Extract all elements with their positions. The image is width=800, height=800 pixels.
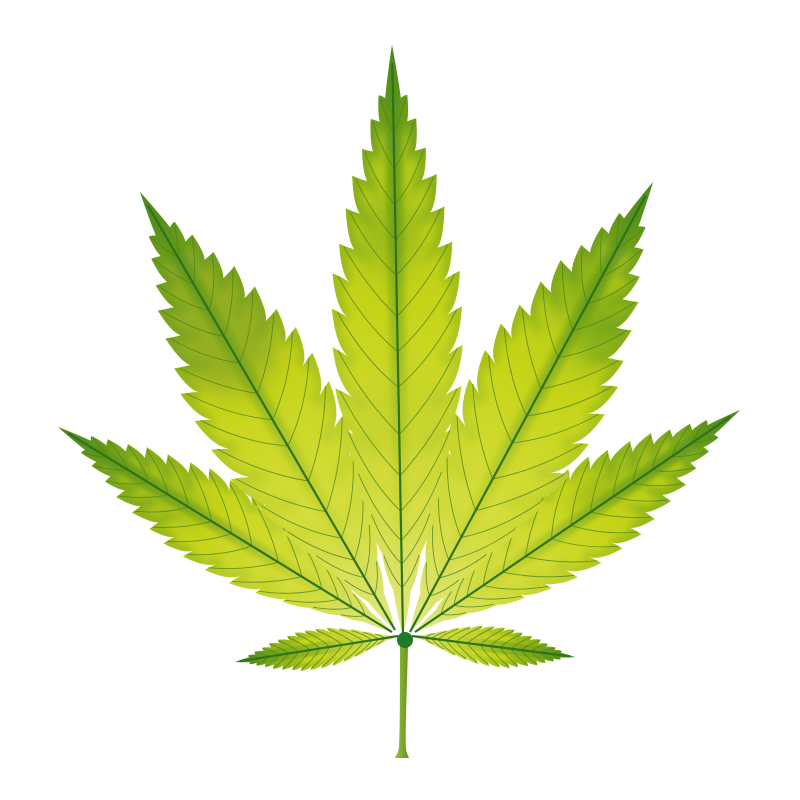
leaflet: lower left [58,427,392,633]
stem [395,645,409,758]
leaflet: bottom left small [232,616,401,682]
leaflet: upper right [409,182,653,632]
node: stem joint [397,632,413,648]
leaflet: upper left [140,192,396,630]
leaflet: centre [327,44,468,636]
illustration: yellowing cannabis leaf [58,45,740,758]
leaflet: bottom right small [409,616,578,677]
leaflet: lower right [414,410,740,633]
